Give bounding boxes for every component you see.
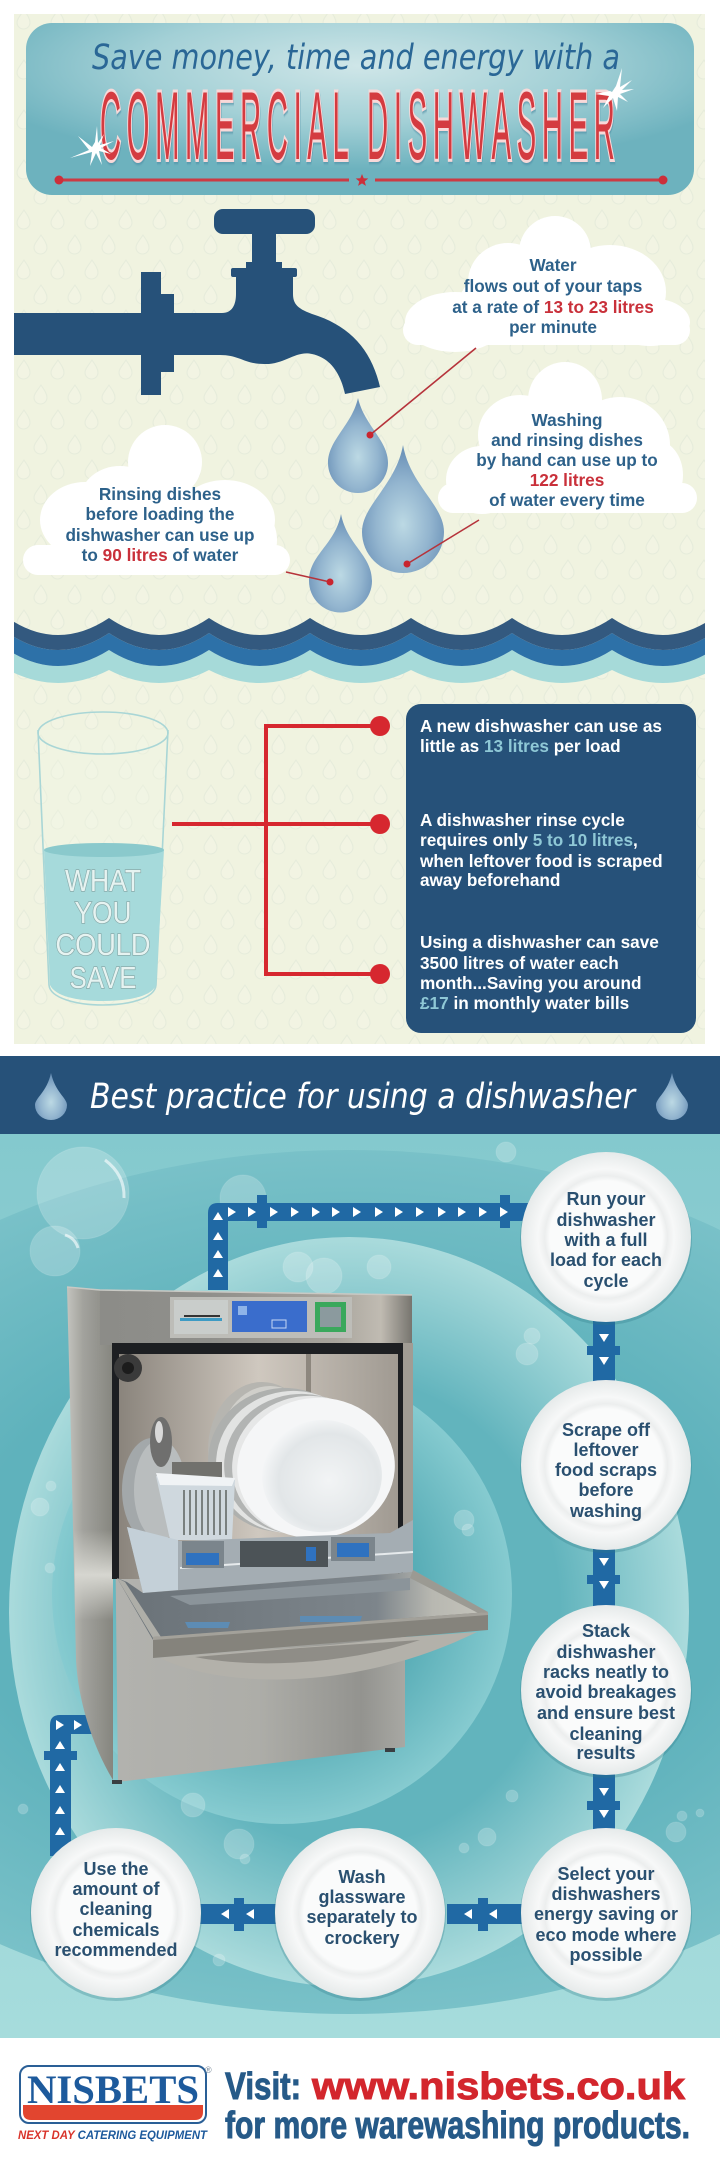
plate: scrape leftovers — [520, 1380, 692, 1553]
plate: cleaning chemicals: amount of — [72, 1879, 160, 1899]
fact: rinse cycle: away beforehand — [420, 870, 560, 890]
text: rinsing dishes: Rinsing dishes — [99, 484, 221, 504]
pipes with arrows — [44, 1195, 620, 1931]
fact: monthly saving: month...Saving you around — [420, 973, 642, 993]
plate: eco mode: possible — [569, 1945, 643, 1965]
waves — [8, 618, 713, 683]
text: washing by hand: of water every time — [489, 490, 645, 510]
side panel — [67, 1287, 113, 1780]
open door — [117, 1570, 488, 1679]
plate: scrape leftovers: leftover — [573, 1440, 639, 1460]
text: rinsing dishes: dishwasher can use up — [65, 525, 255, 545]
text: what you could save — [56, 863, 150, 995]
heading: commercial dishwasher: COMMERCIAL DISHWASHER — [100, 72, 615, 181]
text: what you could save: SAVE — [70, 960, 136, 995]
plate: glassware: Wash — [338, 1867, 386, 1887]
banner: best practice — [0, 1056, 720, 1134]
text: washing by hand: 122 litres — [530, 470, 604, 490]
footer — [0, 2038, 720, 2160]
plate: scrape leftovers: Scrape off — [562, 1420, 651, 1440]
plate: run full load: load for each — [550, 1250, 662, 1270]
text: visit website — [225, 2066, 690, 2147]
plates — [122, 1378, 404, 1548]
fact: 13 litres: A new dishwasher can use as — [420, 716, 662, 736]
divider with star — [54, 174, 668, 186]
fact: rinse cycle: A dishwasher rinse cycle — [420, 810, 625, 830]
plate: stack racks: cleaning — [569, 1724, 643, 1744]
plate: run full load: cycle — [583, 1271, 629, 1291]
icon: tap — [14, 209, 380, 395]
lower front panel — [113, 1345, 405, 1782]
fact: monthly saving: 3500 litres of water each — [420, 953, 619, 973]
text: flow rate: flows out of your taps — [464, 276, 642, 296]
panel: savings facts — [406, 704, 696, 1033]
cutlery basket — [150, 1417, 235, 1540]
plate: scrape leftovers: before — [578, 1480, 634, 1500]
red connector — [172, 716, 390, 984]
logo: Nisbets — [18, 2065, 212, 2142]
plate: eco mode: dishwashers — [551, 1884, 661, 1904]
icon: water drops with callout lines — [286, 348, 479, 612]
fact: 13 litres: little as 13 litres per load — [420, 736, 621, 756]
text: what you could save: WHAT — [65, 863, 141, 898]
text: visit website: www.nisbets.co.uk — [311, 2066, 686, 2108]
plate: scrape leftovers: food scraps — [555, 1460, 657, 1480]
plate: eco mode: eco mode where — [535, 1925, 677, 1945]
fact: monthly saving: Using a dishwasher can save — [420, 932, 659, 952]
control panel — [170, 1297, 352, 1338]
logo: Nisbets: NISBETS — [27, 2067, 199, 2112]
bubbles — [18, 1142, 704, 1966]
plate: scrape leftovers: washing — [569, 1501, 642, 1521]
plate: run full load: dishwasher — [556, 1210, 656, 1230]
plate: glassware — [274, 1828, 446, 2001]
plate: eco mode: energy saving or — [534, 1904, 678, 1924]
icon: banner drop left — [35, 1073, 67, 1120]
cloud: washing by hand — [438, 362, 697, 514]
text: flow rate: Water — [529, 255, 577, 275]
fact: rinse cycle: requires only 5 to 10 litres, — [420, 830, 638, 850]
plate: cleaning chemicals: recommended — [54, 1940, 178, 1960]
fact: rinse cycle — [419, 810, 663, 890]
cloud: rinsing dishes — [23, 425, 290, 575]
plate: cleaning chemicals: chemicals — [72, 1920, 160, 1940]
cavity — [112, 1343, 413, 1583]
plate: run full load: with a full — [564, 1230, 648, 1250]
text: flow rate — [452, 255, 654, 337]
text: what you could save: YOU — [74, 895, 132, 930]
text: flow rate: per minute — [509, 317, 597, 337]
plate: stack racks: and ensure best — [537, 1703, 675, 1723]
fact: monthly saving: £17 in monthly water bills — [420, 993, 629, 1013]
plate: run full load — [520, 1152, 692, 1325]
feet — [112, 1748, 395, 1784]
icon: banner drop right — [656, 1073, 688, 1120]
text: washing by hand: and rinsing dishes — [491, 430, 643, 450]
text: flow rate: at a rate of 13 to 23 litres — [452, 297, 654, 317]
plate: glassware: separately to — [306, 1907, 418, 1927]
text: what you could save: COULD — [56, 927, 150, 962]
heading: save money line: Save money, time and energy with a — [92, 38, 620, 78]
logo: Nisbets: NEXT DAY CATERING EQUIPMENT — [18, 2128, 209, 2142]
text: rinsing dishes — [65, 484, 255, 565]
icon: glass of water — [38, 712, 168, 1005]
text: rinsing dishes: before loading the — [86, 504, 234, 524]
plate: cleaning chemicals — [30, 1828, 202, 2001]
heading: best practice: Best practice for using a dishwasher — [90, 1077, 637, 1117]
icon: sparkle right — [595, 68, 634, 111]
top control fascia — [100, 1290, 412, 1345]
plate: stack racks — [520, 1605, 692, 1778]
fact: 13 litres — [420, 716, 662, 756]
title header — [26, 23, 694, 195]
cloud: taps flow rate — [403, 216, 690, 352]
plate: eco mode — [520, 1828, 692, 2001]
logo: Nisbets: ® — [205, 2065, 212, 2075]
plate: eco mode: Select your — [557, 1864, 655, 1884]
text: washing by hand: Washing — [532, 410, 602, 430]
fact: monthly saving — [420, 932, 659, 1013]
text: washing by hand — [476, 410, 658, 510]
plate: stack racks: Stack — [582, 1621, 631, 1641]
plate: stack racks: dishwasher — [556, 1642, 656, 1662]
panel: best practice background — [0, 1134, 720, 2038]
dishwasher illustration — [67, 1287, 488, 1784]
plate: glassware: glassware — [318, 1887, 406, 1907]
icon: sparkle left — [70, 126, 114, 166]
text: rinsing dishes: to 90 litres of water — [82, 545, 239, 565]
plate: run full load: Run your — [566, 1189, 646, 1209]
plate: stack racks: racks neatly to — [543, 1662, 669, 1682]
plate: stack racks: avoid breakages — [535, 1682, 677, 1702]
plate: cleaning chemicals: cleaning — [79, 1899, 153, 1919]
plate: cleaning chemicals: Use the — [83, 1859, 149, 1879]
fact: rinse cycle: when leftover food is scraped — [419, 851, 663, 871]
plate: stack racks: results — [576, 1743, 636, 1763]
rack — [127, 1520, 413, 1593]
panel: cream water background — [14, 14, 705, 1044]
plate: glassware: crockery — [324, 1928, 400, 1948]
text: washing by hand: by hand can use up to — [476, 450, 658, 470]
text: visit website: Visit: — [225, 2066, 301, 2108]
